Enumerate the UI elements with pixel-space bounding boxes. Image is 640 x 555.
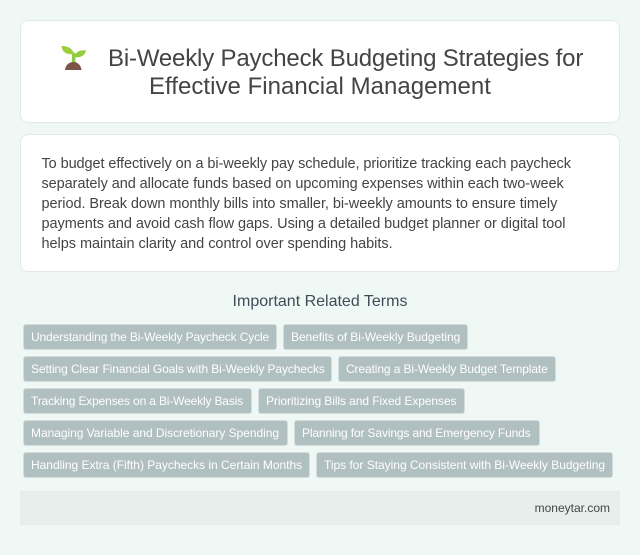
tag: Managing Variable and Discretionary Spending xyxy=(31,426,279,440)
tag xyxy=(338,356,556,382)
tag: Understanding the Bi-Weekly Paycheck Cycle xyxy=(31,330,269,344)
title: Bi-Weekly Paycheck Budgeting Strategies for xyxy=(108,45,583,72)
intro text panel: separately and allocate funds based on upcoming expenses within each two-week xyxy=(42,176,564,192)
tag xyxy=(23,324,277,350)
tag: Setting Clear Financial Goals with Bi-Weekly Paychecks xyxy=(31,362,325,376)
tag xyxy=(23,420,288,446)
tag xyxy=(294,420,540,446)
section heading: Important Related Terms xyxy=(233,293,407,310)
tag xyxy=(23,356,332,382)
icon: seedling xyxy=(62,46,86,70)
tag xyxy=(258,388,465,414)
title: Effective Financial Management xyxy=(149,73,491,100)
intro text panel: helps maintain clarity and control over spending habits. xyxy=(42,236,393,252)
tag: Tracking Expenses on a Bi-Weekly Basis xyxy=(31,394,243,408)
header panel xyxy=(20,20,620,123)
intro text panel: payments and avoid cash flow gaps. Using a detailed budget planner or digital tool xyxy=(42,216,565,232)
tag: Prioritizing Bills and Fixed Expenses xyxy=(266,394,456,408)
intro text panel: To budget effectively on a bi-weekly pay schedule, prioritize tracking each paycheck xyxy=(42,156,571,172)
tag: Creating a Bi-Weekly Budget Template xyxy=(346,362,548,376)
title xyxy=(108,45,583,100)
tag xyxy=(23,388,252,414)
tag xyxy=(283,324,468,350)
intro text panel xyxy=(20,134,620,272)
tag: Planning for Savings and Emergency Funds xyxy=(302,426,531,440)
tag: Tips for Staying Consistent with Bi-Weekly Budgeting xyxy=(324,458,605,472)
intro text panel: period. Break down monthly bills into smaller, bi-weekly amounts to ensure timely xyxy=(42,196,557,212)
footer: moneytar.com xyxy=(535,501,610,515)
tag xyxy=(23,452,310,478)
tag xyxy=(316,452,613,478)
related terms tags xyxy=(23,324,613,478)
footer xyxy=(20,491,620,525)
tag: Handling Extra (Fifth) Paychecks in Certain Months xyxy=(31,458,302,472)
tag: Benefits of Bi-Weekly Budgeting xyxy=(291,330,460,344)
